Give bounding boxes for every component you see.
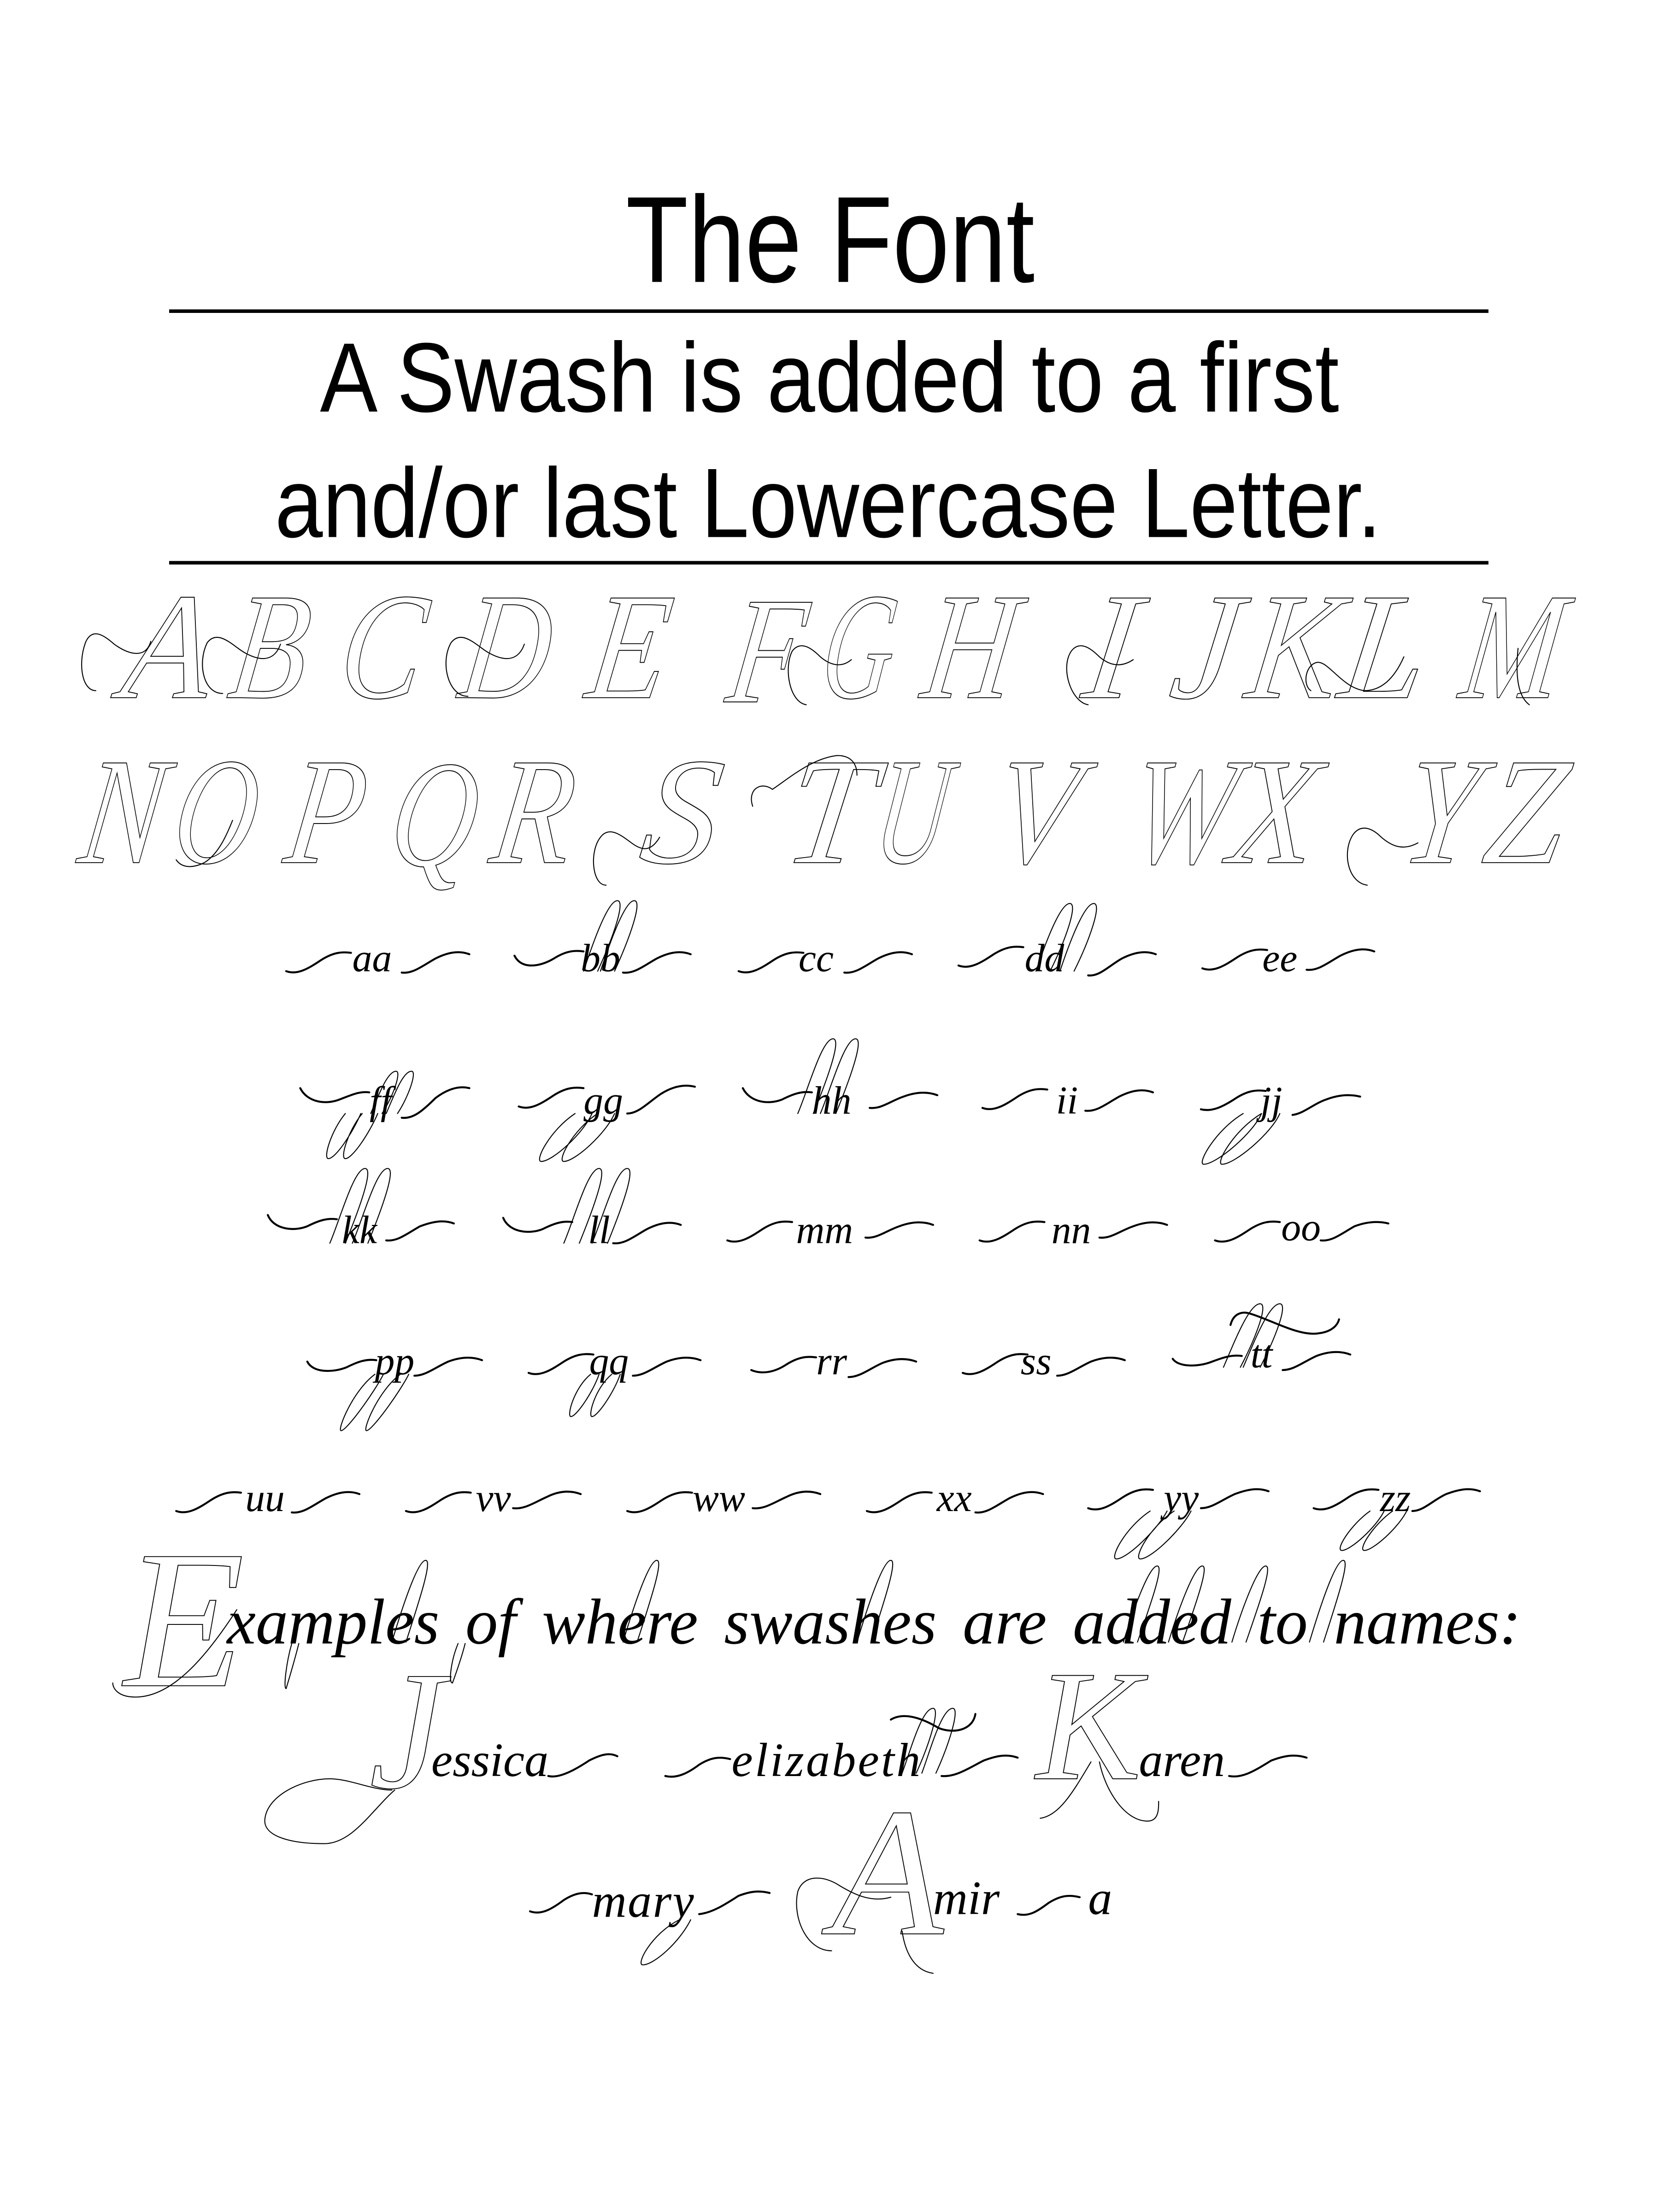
lowercase pairs p to t with swashes	[307, 1304, 1350, 1431]
lowercase pairs p to t with swashes: qq	[589, 1339, 629, 1383]
uppercase alphabet row A to M: D	[450, 562, 563, 731]
name example Amira: A	[820, 1771, 946, 1974]
uppercase alphabet row N to Z	[69, 727, 1581, 899]
lowercase pairs u to z with swashes: ww	[693, 1476, 745, 1520]
subtitle: and/or last Lowercase Letter.	[275, 448, 1381, 558]
lowercase pairs a to e with swashes: ee	[1262, 936, 1297, 980]
uppercase flourishes row one	[82, 634, 1530, 705]
name example elizabeth: elizabeth	[731, 1734, 922, 1787]
lowercase pairs u to z with swashes	[176, 1476, 1480, 1559]
uppercase alphabet row A to M: A	[105, 562, 227, 731]
lowercase pairs a to e with swashes: cc	[799, 936, 834, 980]
uppercase alphabet row A to M: E	[577, 562, 682, 731]
uppercase alphabet row N to Z: O	[165, 727, 270, 896]
uppercase alphabet row N to Z: Q	[381, 729, 489, 899]
lowercase pairs u to z with swashes: zz	[1380, 1476, 1411, 1520]
uppercase alphabet row N to Z: W	[1120, 727, 1259, 896]
subtitle: A Swash is added to a first	[320, 323, 1339, 433]
uppercase alphabet row A to M	[104, 562, 1582, 735]
examples sentence: xamples of where swashes are added to names:	[226, 1586, 1521, 1658]
lowercase pairs a to e with swashes: bb	[581, 936, 620, 980]
uppercase alphabet row A to M: J	[1163, 562, 1257, 731]
name example Jessica: essica	[431, 1734, 548, 1787]
uppercase alphabet row A to M: H	[912, 562, 1035, 731]
lowercase pairs a to e with swashes	[286, 900, 1374, 980]
uppercase alphabet row N to Z: U	[866, 727, 966, 896]
uppercase flourishes row two	[176, 755, 1418, 885]
lowercase pairs p to t with swashes: pp	[372, 1339, 414, 1383]
examples sentence: E	[121, 1510, 245, 1729]
lowercase pairs k to o with swashes: nn	[1052, 1208, 1091, 1252]
name example Amira	[797, 1771, 1112, 1974]
uppercase alphabet row A to M: L	[1329, 562, 1440, 731]
lowercase pairs f to j with swashes: jj	[1256, 1078, 1282, 1122]
name example mary	[530, 1875, 770, 1965]
lowercase pairs f to j with swashes: ii	[1056, 1078, 1078, 1122]
lowercase pairs p to t with swashes: ss	[1021, 1339, 1051, 1383]
lowercase pairs u to z with swashes: xx	[936, 1476, 972, 1520]
lowercase pairs p to t with swashes: tt	[1251, 1332, 1273, 1376]
uppercase alphabet row A to M: K	[1236, 562, 1359, 731]
uppercase alphabet row A to M: C	[331, 562, 439, 731]
name example Karen	[1034, 1639, 1306, 1821]
uppercase alphabet row A to M: G	[813, 562, 907, 731]
uppercase alphabet row N to Z: Y	[1394, 727, 1504, 896]
name example Karen: aren	[1139, 1734, 1225, 1787]
uppercase alphabet row N to Z: S	[632, 727, 732, 896]
name example Jessica: J	[369, 1637, 451, 1824]
lowercase pairs u to z with swashes: vv	[476, 1476, 511, 1520]
lowercase pairs u to z with swashes: yy	[1160, 1476, 1199, 1520]
lowercase pairs f to j with swashes: gg	[583, 1078, 623, 1122]
uppercase alphabet row N to Z: T	[776, 727, 895, 896]
name example Amira: a	[1088, 1872, 1112, 1925]
uppercase alphabet row N to Z: R	[481, 727, 586, 896]
lowercase pairs f to j with swashes: ff	[370, 1078, 396, 1122]
lowercase pairs a to e with swashes: dd	[1025, 936, 1065, 980]
name example Karen: K	[1034, 1639, 1149, 1813]
lowercase pairs k to o with swashes: oo	[1281, 1206, 1321, 1249]
name example Amira: mir	[933, 1872, 1000, 1925]
lowercase pairs k to o with swashes	[268, 1169, 1388, 1252]
name example mary: mary	[592, 1875, 695, 1928]
lowercase pairs a to e with swashes: aa	[353, 936, 392, 980]
name example Jessica	[265, 1637, 618, 1844]
uppercase alphabet row N to Z: P	[275, 727, 377, 896]
lowercase pairs u to z with swashes: uu	[245, 1476, 285, 1520]
uppercase alphabet row A to M: M	[1451, 562, 1582, 731]
uppercase alphabet row N to Z: X	[1215, 727, 1336, 896]
lowercase pairs k to o with swashes: mm	[796, 1208, 853, 1252]
lowercase pairs k to o with swashes: ll	[588, 1208, 610, 1252]
lowercase pairs f to j with swashes: hh	[812, 1078, 851, 1122]
title: The Font	[626, 171, 1035, 308]
uppercase alphabet row A to M: I	[1073, 562, 1156, 731]
uppercase alphabet row N to Z: Z	[1475, 727, 1581, 896]
uppercase alphabet row A to M: F	[718, 566, 818, 735]
uppercase alphabet row N to Z: N	[70, 727, 183, 896]
lowercase pairs f to j with swashes	[300, 1039, 1360, 1164]
uppercase alphabet row A to M: B	[221, 562, 321, 731]
lowercase pairs k to o with swashes: kk	[342, 1208, 378, 1252]
lowercase pairs p to t with swashes: rr	[816, 1339, 847, 1383]
examples sentence	[113, 1510, 1521, 1729]
name example elizabeth	[665, 1708, 1018, 1787]
uppercase alphabet row N to Z: V	[985, 727, 1105, 896]
